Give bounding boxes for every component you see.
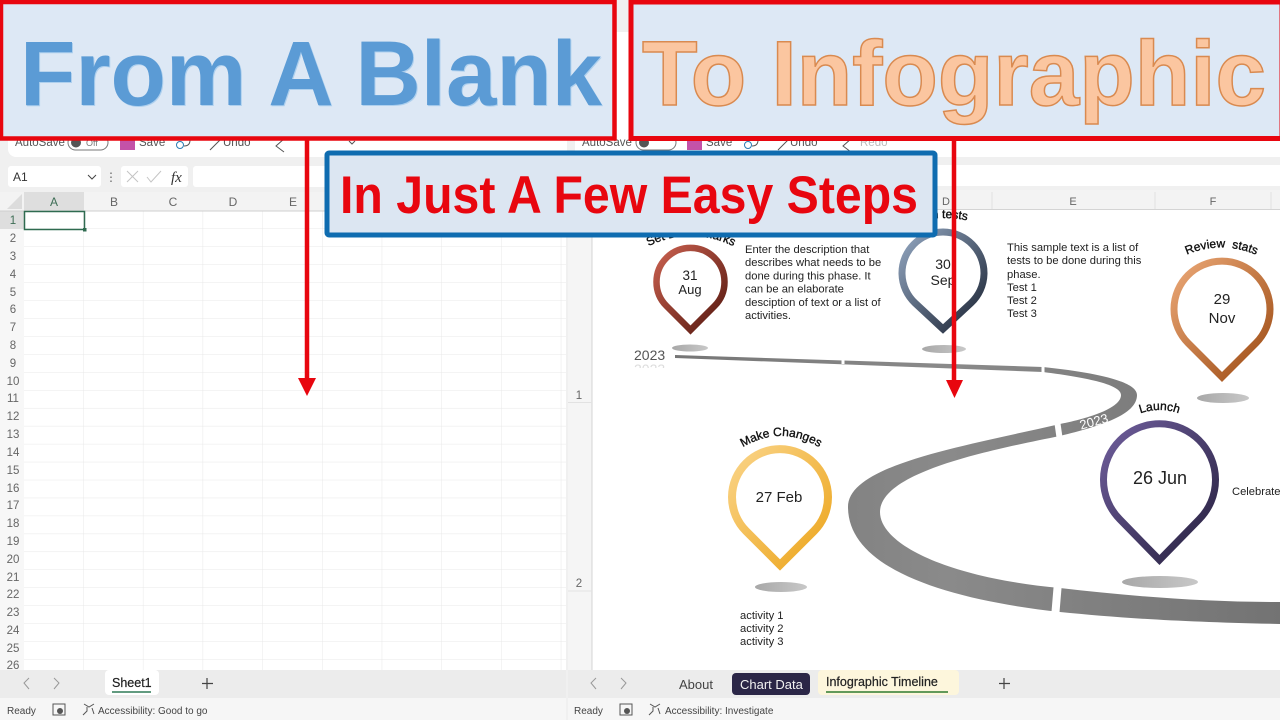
pin: 30 Sep: Sep	[931, 272, 956, 288]
formula bar right	[568, 165, 1280, 186]
text: test list	[1007, 242, 1142, 320]
text: test list: This sample text is a list of	[1007, 242, 1139, 254]
spreadsheet grid left: 26	[7, 660, 19, 672]
pin: 31 Aug: Aug	[678, 282, 702, 297]
spreadsheet grid left: 17	[7, 500, 19, 512]
arrow: blank sheet	[298, 139, 316, 396]
toolbar: quick access right	[575, 125, 1280, 157]
spreadsheet grid left: 16	[7, 483, 19, 495]
sheet tab bar right: Infographic Timeline	[826, 675, 938, 689]
pin: 31 Aug: 31	[682, 268, 698, 283]
formula bar left: A1	[13, 170, 28, 184]
spreadsheet grid left: 23	[7, 607, 19, 619]
spreadsheet grid left: 8	[10, 340, 16, 352]
spreadsheet grid left: C	[169, 195, 178, 209]
status bar right	[568, 698, 1280, 720]
banner: From A Blank: From A Blank	[20, 23, 603, 125]
pin: 30 Sep	[898, 210, 988, 353]
spreadsheet grid right: E	[1069, 196, 1077, 208]
pin: 29 Nov: Nov	[1209, 310, 1236, 327]
banner: To Infographic: To Infographic	[642, 23, 1266, 125]
sheet tab bar right	[568, 670, 1280, 698]
text: celebrate: Celebrate	[1232, 486, 1280, 498]
pin: 26 Jun: Launch	[1138, 403, 1180, 414]
spreadsheet grid left: E	[289, 195, 297, 209]
spreadsheet grid left: 9	[10, 358, 16, 370]
pin: 26 Jun: 26 Jun	[1133, 468, 1187, 488]
toolbar: quick access left: Off	[86, 138, 98, 148]
spreadsheet grid left: 2	[10, 233, 16, 245]
spreadsheet grid right: D	[942, 196, 950, 208]
spreadsheet grid left: 6	[10, 304, 16, 316]
spreadsheet grid right: F	[1210, 196, 1217, 208]
formula bar left: fx	[171, 170, 182, 186]
text: phase description: describes what needs to be	[745, 257, 881, 269]
spreadsheet grid left: 14	[7, 447, 20, 459]
formula bar left: ⋮	[105, 170, 117, 184]
year on road: 2023	[1078, 411, 1110, 433]
pin: 26 Jun	[1100, 403, 1219, 588]
sheet tab bar left: Sheet1	[112, 676, 152, 690]
spreadsheet grid left: 18	[7, 518, 19, 530]
status bar right: Accessibility: Investigate	[665, 706, 774, 717]
formula bar left	[8, 166, 566, 187]
text: test list: Test 2	[1007, 295, 1037, 307]
spreadsheet grid left: B	[110, 195, 118, 209]
toolbar: quick access left: Save	[139, 137, 165, 149]
spreadsheet grid left: 19	[7, 536, 19, 548]
spreadsheet grid left: 7	[10, 322, 16, 334]
text: activity list: activity 2	[740, 623, 784, 635]
text: test list: tests to be done during this	[1007, 255, 1142, 267]
toolbar: quick access right: Undo	[790, 137, 818, 149]
pin: 27 Feb: 27 Feb	[756, 489, 802, 506]
status bar left: Ready	[7, 706, 36, 717]
spreadsheet grid left: D	[229, 195, 238, 209]
pin: 31 Aug: Set Benchmarks	[646, 238, 736, 246]
sheet tab bar right: Chart Data	[740, 677, 804, 692]
sheet tab bar right: About	[679, 677, 713, 692]
spreadsheet grid left: 25	[7, 643, 19, 655]
spreadsheet grid right: 2	[576, 578, 582, 590]
toolbar: quick access left: AutoSave	[15, 137, 65, 149]
toolbar: quick access right: AutoSave	[582, 137, 632, 149]
toolbar: quick access left: Undo	[223, 137, 250, 149]
text: test list: Test 3	[1007, 308, 1037, 320]
year label: 2023	[634, 347, 665, 363]
status bar left: Accessibility: Good to go	[98, 706, 208, 717]
text: phase description: desciption of text or a list of	[745, 297, 881, 309]
pin: 30 Sep: 30	[935, 256, 951, 272]
pin: 31 Aug	[646, 238, 736, 352]
spreadsheet grid left: 15	[7, 465, 19, 477]
ribbon strip behind banners	[0, 32, 1280, 125]
spreadsheet grid right	[568, 190, 1280, 670]
spreadsheet grid left: 21	[7, 572, 19, 584]
road timeline: 2023	[634, 361, 665, 377]
text: activity list: activity 1	[740, 610, 784, 622]
banner: In Just A Few Easy Steps	[327, 153, 935, 235]
toolbar: quick access right: Save	[706, 137, 732, 149]
pin: 27 Feb: Make Changes	[740, 427, 822, 447]
pin: 29 Nov: Review stats	[1184, 240, 1258, 254]
spreadsheet grid right: 1	[576, 390, 582, 402]
spreadsheet grid left: 11	[7, 393, 19, 405]
status bar left	[0, 698, 566, 720]
status bar right: Ready	[574, 706, 603, 717]
text: phase description: can be an elaborate	[745, 284, 844, 296]
pin: 29 Nov: 29	[1214, 291, 1230, 308]
spreadsheet grid left	[0, 192, 566, 672]
pin: 30 Sep: Run tests	[938, 210, 968, 220]
text: phase description: activities.	[745, 310, 791, 322]
text: activity list	[740, 610, 784, 648]
text: phase description: done during this phase. It	[745, 270, 872, 282]
toolbar: quick access right: Redo	[860, 137, 888, 149]
spreadsheet grid left: 1	[10, 215, 16, 227]
sheet tab bar left	[0, 670, 566, 698]
text: test list: phase.	[1007, 269, 1041, 281]
spreadsheet grid left: 24	[7, 625, 20, 637]
text: phase description: Enter the description that	[745, 244, 870, 256]
text: test list: Test 1	[1007, 282, 1037, 294]
pin: 29 Nov	[1170, 240, 1274, 403]
spreadsheet grid left: 10	[7, 376, 19, 388]
spreadsheet grid left: 3	[10, 251, 16, 263]
banner: In Just A Few Easy Steps: In Just A Few Easy Steps	[340, 166, 918, 225]
spreadsheet grid left: 20	[7, 554, 19, 566]
spreadsheet grid left: 4	[10, 269, 17, 281]
text: activity list: activity 3	[740, 636, 784, 648]
road timeline	[630, 347, 1280, 624]
text: phase description	[745, 244, 881, 322]
spreadsheet grid left: 5	[10, 287, 16, 299]
toolbar: quick access left	[8, 125, 567, 157]
arrow: infographic	[946, 139, 963, 398]
panel: finished workbook	[568, 125, 1280, 717]
panel: blank workbook	[0, 125, 567, 720]
spreadsheet grid left: 13	[7, 429, 19, 441]
spreadsheet grid left: 22	[7, 589, 19, 601]
pin: 27 Feb	[728, 427, 832, 592]
spreadsheet grid left: A	[50, 195, 58, 209]
spreadsheet grid left: 12	[7, 411, 19, 423]
